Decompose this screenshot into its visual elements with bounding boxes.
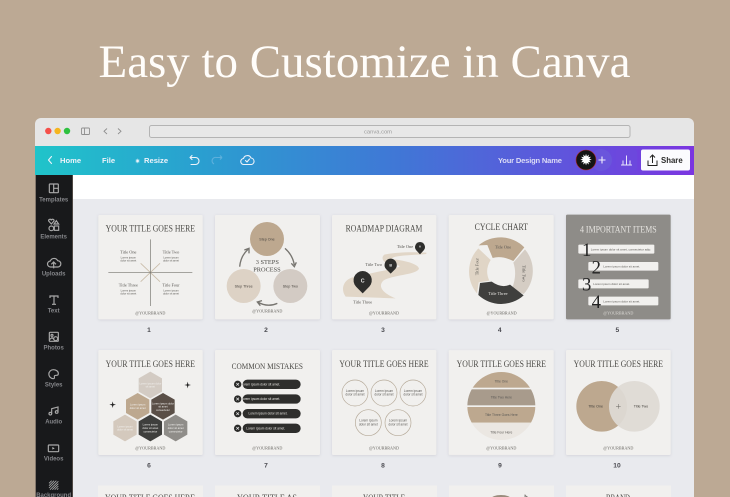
quadrant labels: Lorem ipsum: [121, 256, 137, 260]
quadrant labels: [119, 250, 180, 295]
slide 5 brand: @YOURBRAND: [603, 311, 633, 316]
circle 1: dolor sit amet: [346, 393, 365, 397]
quadrant labels: dolor sit amet: [120, 258, 137, 262]
item 1: Lorem ipsum dolor sit amet, consectetur adip.: [591, 247, 651, 251]
slide 9 number: 9: [498, 462, 502, 469]
circle 1: [342, 380, 368, 406]
address bar: [150, 126, 630, 138]
home button: [48, 156, 81, 165]
slide 7 brand: @YOURBRAND: [252, 446, 282, 451]
hexagon left: [126, 393, 149, 420]
centre heading: PROCESS: [253, 266, 281, 273]
sidebar item: styles: [45, 370, 63, 389]
slide 12: [215, 486, 320, 497]
slide 10 brand: @YOURBRAND: [603, 446, 633, 451]
bottom row slides (cropped): [98, 486, 671, 497]
sidebar item: background: [36, 481, 71, 497]
item 2: 2: [592, 257, 601, 278]
item 2: [588, 257, 658, 278]
title: Easy to Customize in Canva: [98, 36, 631, 88]
band 1: Title One: [495, 379, 508, 383]
slide 8 brand: @YOURBRAND: [369, 446, 399, 451]
step three circle: Step Three: [235, 284, 253, 288]
slide 8: circles: [332, 350, 436, 469]
slide 2: three steps process: [215, 215, 320, 334]
slide 4: cycle chart: [449, 215, 554, 334]
mistake row 2: Lorem ipsum dolor sit amet.: [241, 397, 280, 401]
sidebar item: text: Text: [48, 309, 60, 315]
redo icon: [212, 156, 222, 164]
slide 3 number: 3: [381, 327, 385, 334]
venn circle two: Title Two: [634, 404, 648, 408]
slide 4 number: 4: [498, 327, 502, 334]
slide 10 number: 10: [613, 462, 621, 469]
slide 6: hexagon diagram: [98, 350, 203, 469]
hexagon bottom centre: consectetur: [143, 429, 157, 433]
circle 4: dolor sit amet: [359, 422, 378, 426]
quadrant labels: Title Three: [119, 283, 138, 288]
slide 5: four important items: [566, 215, 671, 334]
sidebar item: elements: [40, 219, 68, 241]
sidebar item: videos: [44, 445, 64, 463]
sidebar item: photos: [44, 332, 64, 352]
hexagon bottom right: consectetur: [169, 429, 183, 433]
circle 3: dolor sit amet: [404, 393, 423, 397]
slide 3 brand: @YOURBRAND: [369, 311, 399, 316]
mistake row 1: Lorem ipsum dolor sit amet.: [241, 382, 280, 386]
hexagon bottom centre: dolor sit amet: [142, 426, 159, 430]
slide 7 number: 7: [264, 462, 268, 469]
item 1: 1: [582, 240, 591, 261]
circle 4: [355, 410, 381, 436]
hexagon bottom left: [113, 415, 137, 441]
sidebar item: elements: Elements: [40, 235, 68, 241]
axis lines: [108, 239, 192, 306]
circle 5: dolor sit amet: [389, 422, 408, 426]
segment three: Title Three: [488, 291, 508, 296]
browser frame right edge: [694, 118, 730, 497]
resize menu: Resize: [144, 156, 168, 165]
sparkle left: [109, 401, 116, 408]
mistake row 4: Lorem ipsum dolor sit amet.: [246, 426, 285, 430]
slide 7 title: COMMON MISTAKES: [232, 362, 303, 371]
segment two: Title Two: [522, 265, 527, 282]
hexagon bottom centre: [139, 415, 162, 441]
quadrant labels: Title Four: [162, 283, 180, 288]
insights icon: [616, 150, 637, 170]
sidebar item: templates: [39, 184, 69, 203]
slide 6 brand: @YOURBRAND: [135, 446, 165, 451]
circle 5: [385, 410, 411, 436]
slide 11: [98, 486, 203, 497]
centre heading: 3 STEPS: [256, 259, 279, 266]
slide 8 number: 8: [381, 462, 385, 469]
winding road: [343, 252, 426, 298]
slide 1 title: YOUR TITLE GOES HERE: [106, 224, 195, 234]
window controls: [45, 128, 70, 134]
pin B: B: [389, 263, 392, 267]
canva toolbar: [35, 146, 694, 175]
step two circle: Step Two: [283, 284, 298, 288]
quadrant labels: Title One: [120, 250, 137, 255]
slide 8 title: YOUR TITLE GOES HERE: [339, 359, 429, 369]
slide 5 title: 4 IMPORTANT ITEMS: [580, 224, 657, 234]
sidebar item: audio: Audio: [45, 420, 62, 426]
circle 2: dolor sit amet: [375, 393, 394, 397]
hexagon right: consectetur: [156, 408, 170, 412]
circle 3: Lorem ipsum: [404, 389, 422, 393]
item 4: 4: [592, 292, 602, 313]
hexagon bottom left: Lorem ipsum: [117, 424, 133, 428]
slide 10 title: YOUR TITLE GOES HERE: [574, 359, 663, 369]
item 3: [578, 275, 649, 296]
mistake row 3: Lorem ipsum dolor sit amet.: [249, 412, 288, 416]
sidebar item: audio: [45, 407, 62, 426]
undo icon: [190, 156, 199, 164]
slide 2 brand: @YOURBRAND: [252, 308, 282, 313]
item 1: [578, 240, 654, 261]
file menu: File: [102, 156, 115, 165]
hexagon top: sit amet: [146, 385, 155, 389]
circle 5: Lorem ipsum: [389, 419, 407, 423]
sidebar item: videos: Videos: [44, 457, 64, 463]
slide 13: [332, 486, 437, 497]
pin A: A: [419, 245, 422, 249]
slide 3 title: ROADMAP DIAGRAM: [346, 223, 422, 233]
address bar: canva.com: [364, 130, 392, 136]
slide 2 number: 2: [264, 327, 268, 334]
quadrant labels: dolor sit amet: [163, 291, 179, 295]
hexagon left: dolor sit amet: [130, 406, 146, 410]
sidebar: [36, 175, 73, 497]
slide 6 title: YOUR TITLE GOES HERE: [106, 359, 195, 369]
sparkle right: [184, 382, 191, 388]
home button: Home: [60, 156, 81, 165]
design name: Your Design Name: [498, 156, 562, 165]
quadrant labels: Title Two: [163, 250, 179, 255]
canvas white strip: [73, 175, 694, 199]
plus sign: [616, 404, 621, 409]
resize menu: [135, 156, 168, 166]
circle 1: Lorem ipsum: [346, 389, 364, 393]
avatar: ✹: [580, 151, 592, 169]
sidebar item: styles: Styles: [45, 383, 63, 389]
circle 2: Lorem ipsum: [375, 389, 393, 393]
sidebar item: text: [48, 296, 60, 315]
pin C: C: [361, 278, 365, 284]
share button: Share: [661, 156, 683, 165]
band 2: Title Two Here: [491, 396, 512, 400]
slide 14: [449, 486, 554, 497]
hexagon right: sit amet: [158, 405, 168, 409]
hexagon right: [151, 393, 175, 420]
slide 15: [566, 486, 671, 497]
item 3: 3: [582, 275, 591, 296]
centre heading: [253, 259, 281, 273]
circle 3: [400, 380, 426, 406]
segment one: Title One: [495, 244, 511, 249]
cloud save icon: [241, 156, 254, 165]
hexagon right: Lorem ipsum dolor: [152, 401, 174, 405]
quadrant labels: dolor sit amet: [120, 291, 137, 295]
roadmap labels: Title Two: [365, 262, 382, 267]
band 4: Title Four Here: [490, 430, 513, 434]
slide 9: stacked circle bands: [449, 350, 554, 469]
hexagon bottom left: dolor sit amet: [117, 428, 133, 432]
sidebar item: uploads: [42, 258, 66, 278]
slide 6 number: 6: [147, 462, 151, 469]
canvas background: [73, 199, 694, 497]
circle 2: [371, 380, 397, 406]
hexagon bottom right: Lorem ipsum: [168, 423, 184, 427]
item 2: Lorem ipsum dolor sit amet.: [603, 265, 640, 269]
slide 1 number: 1: [147, 327, 151, 334]
quadrant labels: Lorem ipsum: [163, 256, 179, 260]
quadrant diagonals: [141, 263, 160, 282]
slide 9 brand: @YOURBRAND: [486, 446, 516, 451]
item 4: Lorem ipsum dolor sit amet.: [603, 299, 640, 303]
hexagon top: Lorem ipsum dolor: [139, 381, 161, 385]
slide 10: venn diagram: [566, 350, 671, 469]
avatar: [576, 150, 596, 170]
slide 4 title: CYCLE CHART: [475, 222, 528, 232]
circle 4: Lorem ipsum: [359, 419, 378, 423]
browser navigation icons: [82, 128, 121, 134]
band 3: Title Three Goes Here: [485, 413, 518, 417]
slide 9 title: YOUR TITLE GOES HERE: [457, 359, 546, 369]
item 3: Lorem ipsum dolor sit amet.: [593, 282, 630, 286]
slide 7: common mistakes: [215, 350, 320, 469]
item 4: [588, 292, 658, 313]
quadrant labels: Lorem ipsum: [163, 289, 179, 293]
browser title bar: [35, 118, 694, 146]
hexagon bottom right: [164, 415, 187, 441]
sidebar item: photos: Photos: [44, 346, 64, 352]
slide 1: quadrant diagram: [98, 215, 203, 334]
slide 4 brand: @YOURBRAND: [487, 311, 517, 316]
segment four: Title Four: [475, 257, 480, 275]
quadrant labels: dolor sit amet: [163, 258, 179, 262]
slide 5 number: 5: [615, 327, 619, 334]
hexagon top: [139, 372, 162, 398]
step one circle: Step One: [259, 237, 275, 241]
hexagon left: Lorem ipsum: [130, 403, 146, 407]
roadmap labels: Title Three: [353, 300, 372, 305]
slide 1 brand: @YOURBRAND: [135, 311, 165, 316]
share button: [641, 150, 690, 170]
sidebar item: uploads: Uploads: [42, 272, 66, 278]
hexagon bottom right: dolor sit amet: [168, 426, 184, 430]
sidebar item: templates: Templates: [39, 197, 69, 203]
add collaborator button: [590, 149, 612, 171]
quadrant labels: Lorem ipsum: [121, 289, 137, 293]
resize menu: ✷: [135, 158, 141, 166]
venn circle one: Title One: [588, 404, 603, 408]
roadmap labels: Title One: [397, 244, 413, 249]
slide 3: roadmap diagram: [332, 215, 436, 334]
roadmap labels: [353, 244, 413, 305]
hexagon bottom centre: Lorem ipsum: [143, 423, 159, 427]
cycle arrows: [240, 248, 296, 306]
